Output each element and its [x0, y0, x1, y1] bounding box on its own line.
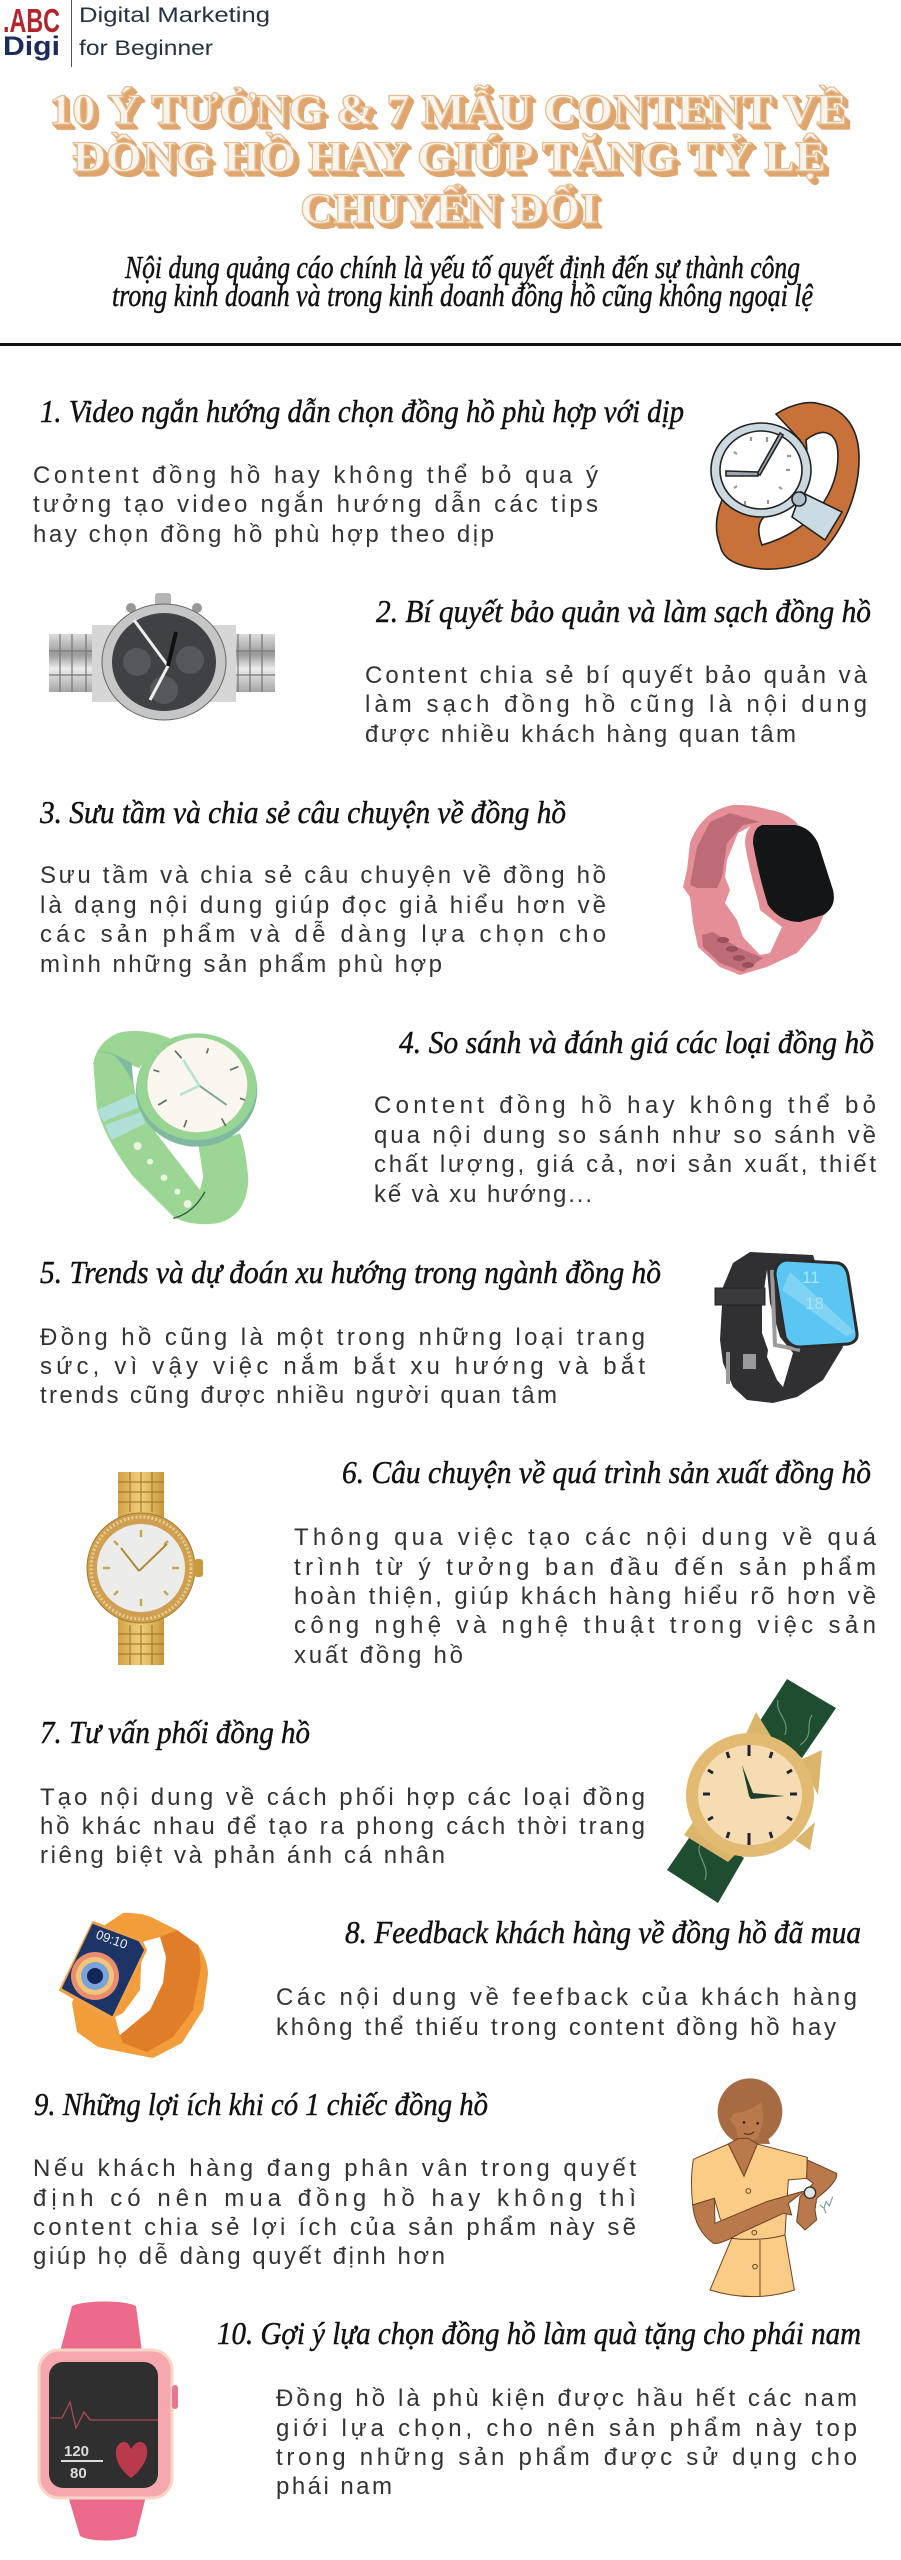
heading 3: 3. Sưu tầm và chia sẻ câu chuyện về đồng hồ: [39, 794, 566, 830]
text 6: trình từ ý tưởng ban đầu đến sản phẩm: [294, 1554, 876, 1581]
text 1: tưởng tạo video ngắn hướng dẫn các tips: [33, 491, 598, 518]
text 7: riêng biệt và phản ánh cá nhân: [40, 1842, 445, 1869]
panel: item 8: [60, 1913, 861, 2058]
text 7: Tạo nội dung về cách phối hợp các loại đồng: [40, 1784, 645, 1811]
icon: pink smartwatch: 80: [70, 2465, 87, 2482]
divider rule: [0, 343, 901, 346]
heading 5: 5. Trends và dự đoán xu hướng trong ngành đồng hồ: [40, 1254, 661, 1290]
text 8: Các nội dung về feefback của khách hàng: [276, 1984, 857, 2011]
text 6: hoàn thiện, giúp khách hàng hiểu rõ hơn về: [294, 1583, 876, 1610]
text 6: Thông qua việc tạo các nội dung về quá: [294, 1524, 877, 1551]
text 10: phái nam: [276, 2473, 392, 2500]
text 9: Nếu khách hàng đang phân vân trong quyết: [33, 2155, 636, 2182]
text 7: [40, 1784, 645, 1869]
panel: item 1: [33, 393, 859, 569]
text 3: là dạng nội dung giúp đọc giả hiểu hơn về: [40, 892, 606, 919]
text 5: Đồng hồ cũng là một trong những loại trang: [40, 1324, 645, 1351]
panel: item 9: [33, 2078, 837, 2297]
intro text: [112, 249, 814, 313]
text 1: hay chọn đồng hồ phù hợp theo dịp: [33, 521, 494, 548]
heading 1: 1. Video ngắn hướng dẫn chọn đồng hồ phù hợp với dịp: [40, 393, 684, 429]
text 6: [294, 1524, 877, 1669]
icon: green watch: [93, 1031, 257, 1224]
text 7: hồ khác nhau để tạo ra phong cách thời trang: [40, 1813, 645, 1840]
text 4: chất lượng, giá cả, nơi sản xuất, thiết: [374, 1151, 876, 1178]
text 5: trends cũng được nhiều người quan tâm: [40, 1382, 557, 1409]
icon: gold watch with green strap: [667, 1679, 836, 1903]
title: [49, 85, 847, 233]
heading 2: 2. Bí quyết bảo quản và làm sạch đồng hồ: [376, 593, 871, 629]
title: ĐỒNG HỒ HAY GIÚP TĂNG TỶ LỆ: [72, 133, 826, 181]
text 6: công nghệ và nghệ thuật trong việc sản: [294, 1612, 876, 1639]
logo: for Beginner: [79, 37, 213, 60]
icon: orange smartwatch: 09:10: [94, 1927, 130, 1952]
logo: [3, 0, 270, 67]
text 10: giới lựa chọn, cho nên sản phẩm này top: [276, 2415, 857, 2442]
panel: item 2: [49, 593, 871, 748]
text 3: [40, 862, 606, 978]
text 9: content chia sẻ lợi ích của sản phẩm này sẽ: [33, 2214, 636, 2241]
title: 10 Ý TƯỞNG & 7 MẪU CONTENT VỀ: [49, 85, 847, 134]
icon: orange strap watch: [711, 403, 859, 569]
text 8: [276, 1984, 857, 2041]
heading 4: 4. So sánh và đánh giá các loại đồng hồ: [399, 1024, 874, 1060]
text 4: qua nội dung so sánh như so sánh về: [374, 1122, 876, 1149]
text 2: [365, 662, 868, 748]
panel: item 5: [40, 1252, 857, 1409]
text 6: xuất đồng hồ: [294, 1642, 463, 1669]
icon: pink smartwatch: [39, 2302, 178, 2540]
text 2: làm sạch đồng hồ cũng là nội dung: [365, 691, 867, 718]
logo: .ABC: [3, 2, 60, 39]
heading 9: 9. Những lợi ích khi có 1 chiếc đồng hồ: [34, 2086, 488, 2122]
text 10: Đồng hồ là phù kiện được hầu hết các nam: [276, 2385, 857, 2412]
text 2: được nhiều khách hàng quan tâm: [365, 721, 796, 748]
panel: item 6: [87, 1454, 877, 1669]
text 9: [33, 2155, 636, 2270]
icon: pink smartwatch: 120: [64, 2443, 89, 2460]
heading 7: 7. Tư vấn phối đồng hồ: [40, 1714, 310, 1750]
logo: Digi: [3, 31, 60, 61]
text 4: [374, 1092, 876, 1208]
text 3: mình những sản phẩm phù hợp: [40, 951, 442, 978]
title: CHUYỂN ĐỔI: [300, 184, 598, 233]
icon: woman checking watch: [691, 2078, 837, 2297]
text 1: [33, 462, 598, 548]
icon: pink fitness band: [683, 805, 834, 975]
icon: gold watch: [87, 1472, 203, 1665]
text 3: Sưu tầm và chia sẻ câu chuyện về đồng hồ: [40, 862, 606, 889]
icon: orange smartwatch: [60, 1913, 208, 2058]
text 4: Content đồng hồ hay không thể bỏ: [374, 1092, 876, 1119]
text 3: các sản phẩm và dễ dàng lựa chọn cho: [40, 921, 606, 948]
text 5: sức, vì vậy việc nắm bắt xu hướng và bắt: [40, 1353, 645, 1380]
text 2: Content chia sẻ bí quyết bảo quản và: [365, 662, 868, 689]
text 8: không thể thiếu trong content đồng hồ hay: [276, 2014, 836, 2041]
text 1: Content đồng hồ hay không thể bỏ qua ý: [33, 462, 598, 489]
heading 8: 8. Feedback khách hàng về đồng hồ đã mua: [345, 1914, 861, 1950]
icon: black smartwatch: 11: [802, 1268, 820, 1287]
text 4: kế và xu hướng...: [374, 1181, 592, 1208]
panel: item 3: [39, 794, 834, 978]
panel: item 7: [40, 1679, 836, 1903]
logo: Digital Marketing: [79, 4, 270, 27]
icon: black smartwatch: [715, 1252, 857, 1403]
panel: item 10: [39, 2302, 861, 2540]
text 10: [276, 2385, 857, 2500]
panel: item 4: [93, 1024, 876, 1224]
text 9: định có nên mua đồng hồ hay không thì: [33, 2185, 636, 2212]
icon: black smartwatch: 18: [805, 1294, 824, 1313]
text 10: trong những sản phẩm được sử dụng cho: [276, 2444, 857, 2471]
text 9: giúp họ dễ dàng quyết định hơn: [33, 2243, 445, 2270]
icon: silver watch: [49, 593, 275, 720]
text 5: [40, 1324, 645, 1409]
heading 6: 6. Câu chuyện về quá trình sản xuất đồng hồ: [342, 1454, 871, 1490]
